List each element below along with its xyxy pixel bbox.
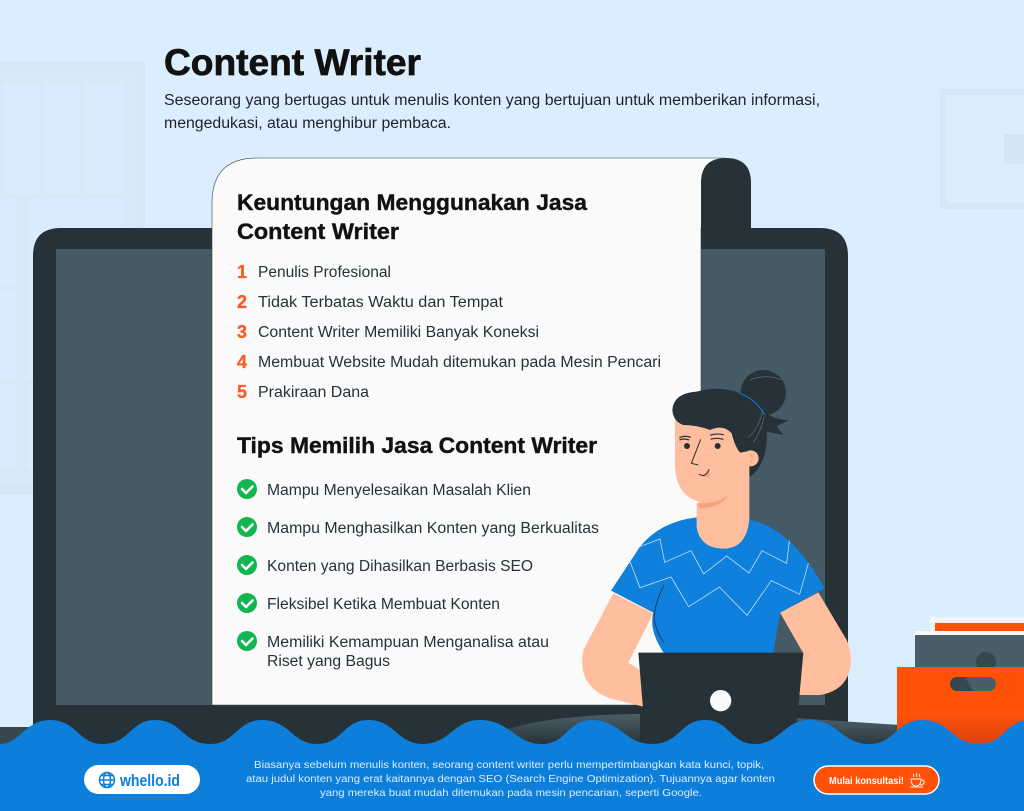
footer text: atau judul konten yang erat kaitannya dengan SEO (Search Engine Optimization). Tujuannya agar konten (246, 773, 775, 785)
heading: keuntungan: Content Writer (237, 219, 399, 244)
desk base (0, 726, 900, 760)
heading: tips: Tips Memilih Jasa Content Writer (237, 433, 597, 458)
window right (943, 92, 1024, 206)
footer wave (0, 720, 1024, 811)
tips list: Konten yang Dihasilkan Berbasis SEO (267, 558, 533, 575)
numbered list: Membuat Website Mudah ditemukan pada Mesin Pencari (258, 354, 661, 371)
footer text (246, 759, 775, 799)
title: Content Writer (164, 42, 421, 83)
footer text: Biasanya sebelum menulis konten, seorang content writer perlu mempertimbangkan kata kunci, topik, (254, 759, 764, 771)
storage box (897, 617, 1024, 745)
window left (0, 61, 145, 495)
tips list: Mampu Menghasilkan Konten yang Berkualitas (267, 520, 599, 537)
numbered list: Content Writer Memiliki Banyak Koneksi (258, 324, 539, 341)
heading: keuntungan (237, 190, 587, 244)
logo pill (84, 765, 200, 794)
heading: keuntungan: Keuntungan Menggunakan Jasa (237, 190, 587, 215)
tips list: Memiliki Kemampuan Menganalisa atau (267, 634, 549, 651)
numbered list: Penulis Profesional (258, 264, 391, 281)
intro text (164, 92, 820, 132)
button: mulai konsultasi: Mulai konsultasi! (829, 776, 904, 787)
person (582, 370, 851, 745)
numbered list: Tidak Terbatas Waktu dan Tempat (258, 294, 504, 311)
intro text: mengedukasi, atau menghibur pembaca. (164, 115, 451, 132)
icon: coffee cup (910, 773, 924, 787)
numbered list: 2 (237, 292, 247, 312)
icon: globe (100, 772, 114, 788)
tips list: Mampu Menyelesaikan Masalah Klien (267, 482, 531, 499)
intro text: Seseorang yang bertugas untuk menulis konten yang bertujuan untuk memberikan informasi, (164, 92, 820, 109)
tips list: Riset yang Bagus (267, 653, 390, 670)
desk items (0, 714, 900, 750)
footer text: yang mereka buat mudah ditemukan pada mesin pencarian, seperti Google. (320, 787, 702, 799)
numbered list: 1 (237, 262, 247, 282)
paper (212, 158, 751, 705)
tips list: Fleksibel Ketika Membuat Konten (267, 596, 500, 613)
laptop frame (33, 228, 848, 730)
numbered list: Prakiraan Dana (258, 384, 369, 401)
numbered list: 4 (237, 352, 247, 372)
logo pill: whello.id (119, 771, 180, 790)
check icons (237, 479, 257, 651)
button: mulai konsultasi (814, 766, 939, 794)
numbered list: 5 (237, 382, 247, 402)
numbered list (237, 262, 661, 402)
tips list (267, 482, 599, 670)
numbered list: 3 (237, 322, 247, 342)
